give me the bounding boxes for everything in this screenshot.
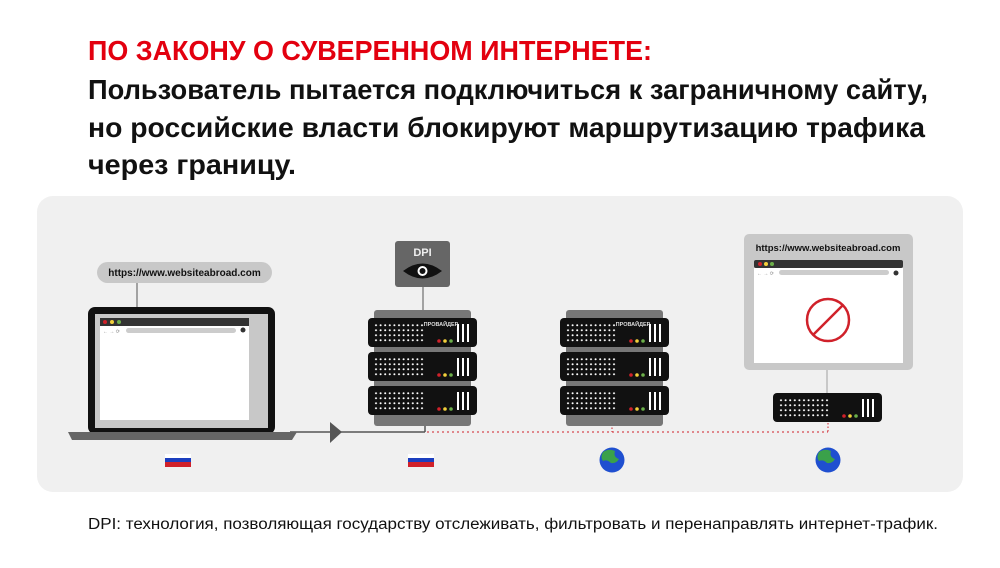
title: Пользователь пытается подключиться к заграничному сайту, — [88, 74, 928, 105]
icon: blocked — [807, 299, 849, 341]
blocked website monitor: ← → ⟳ — [757, 271, 775, 277]
icon: globe — [816, 448, 840, 472]
url bubble: https://www.websiteabroad.com — [108, 268, 261, 279]
title: но российские власти блокируют маршрутизацию трафика — [88, 112, 925, 143]
server stack: foreign provider: ПРОВАЙДЕР — [616, 320, 651, 328]
foreign server — [773, 393, 882, 432]
title: ПО ЗАКОНУ О СУВЕРЕННОМ ИНТЕРНЕТЕ: — [88, 35, 652, 66]
dotted red line — [427, 431, 828, 433]
laptop: ← → ⟳ — [103, 329, 121, 335]
blocked website monitor — [744, 234, 913, 393]
blocked website monitor: https://www.websiteabroad.com — [756, 243, 900, 254]
icon: DPI eye — [395, 241, 450, 312]
panel: diagram — [37, 196, 963, 492]
server stack: Russian provider: ПРОВАЙДЕР — [424, 320, 459, 328]
server stack: Russian provider — [368, 310, 477, 426]
server stack: foreign provider — [560, 310, 669, 432]
url bubble — [97, 262, 272, 283]
title — [88, 35, 928, 180]
laptop — [68, 262, 297, 440]
footnote: DPI: технология, позволяющая государству отслеживать, фильтровать и перенаправлять интернет-трафик. — [88, 516, 938, 533]
flag: Russia (laptop) — [165, 454, 191, 467]
icon: globe — [600, 448, 624, 472]
flag: Russia (provider) — [408, 454, 434, 467]
title: через границу. — [88, 149, 296, 180]
icon: DPI eye: DPI — [413, 247, 432, 259]
connection line with arrow — [290, 422, 425, 443]
